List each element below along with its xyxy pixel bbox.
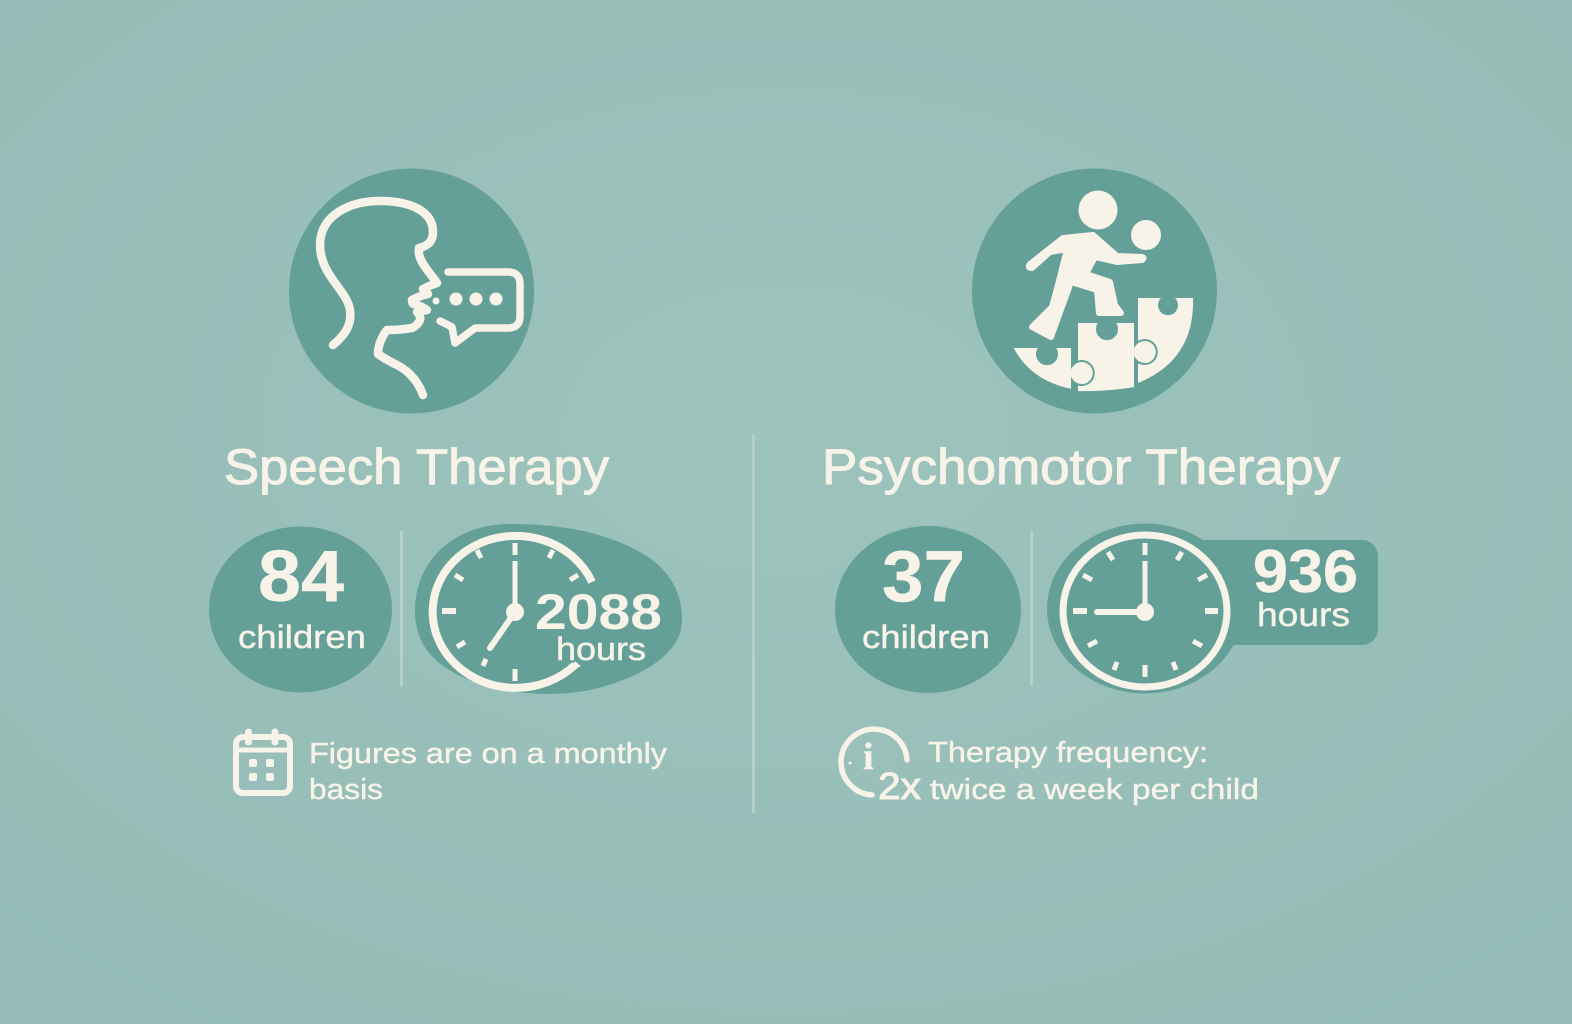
stat: 2088 hours with clock: 2088 — [535, 584, 662, 640]
note: therapy frequency — [841, 729, 1259, 808]
icon: calendar — [236, 732, 290, 793]
stat: 37 children — [835, 526, 1021, 693]
note: therapy frequency: Therapy frequency: — [928, 737, 1208, 769]
icon: clock — [1063, 535, 1227, 687]
stat: 936 hours with clock: 936 — [1253, 538, 1358, 605]
note: monthly basis: Figures are on a monthly — [309, 738, 668, 770]
stat: 936 hours with clock — [1047, 524, 1378, 694]
heading: speech therapy: Speech Therapy — [224, 439, 609, 495]
heading: psychomotor therapy: Psychomotor Therapy — [822, 439, 1340, 495]
note: therapy frequency: 2x — [878, 766, 921, 808]
icon: clock — [433, 536, 592, 688]
panel: psychomotor therapy — [822, 168, 1378, 808]
stat: 37 children: children — [862, 619, 990, 655]
stat: 2088 hours with clock: hours — [556, 631, 646, 667]
icon: frequency clock: i — [863, 736, 874, 778]
note: monthly basis — [236, 732, 668, 806]
stat: 84 children — [209, 526, 392, 692]
icon: speaking head — [289, 168, 534, 414]
stat: 84 children: 84 — [258, 537, 344, 617]
note: monthly basis: basis — [309, 774, 383, 806]
stat: 37 children: 37 — [882, 537, 965, 617]
icon: child climbing puzzle — [972, 168, 1217, 414]
note: therapy frequency: twice a week per child — [930, 774, 1259, 806]
panel: speech therapy — [209, 168, 682, 806]
center divider — [752, 435, 755, 813]
icon: frequency clock — [841, 729, 907, 795]
stat: 936 hours with clock: hours — [1257, 596, 1350, 633]
stat: 84 children: children — [238, 619, 366, 655]
stat: 2088 hours with clock — [415, 524, 682, 694]
